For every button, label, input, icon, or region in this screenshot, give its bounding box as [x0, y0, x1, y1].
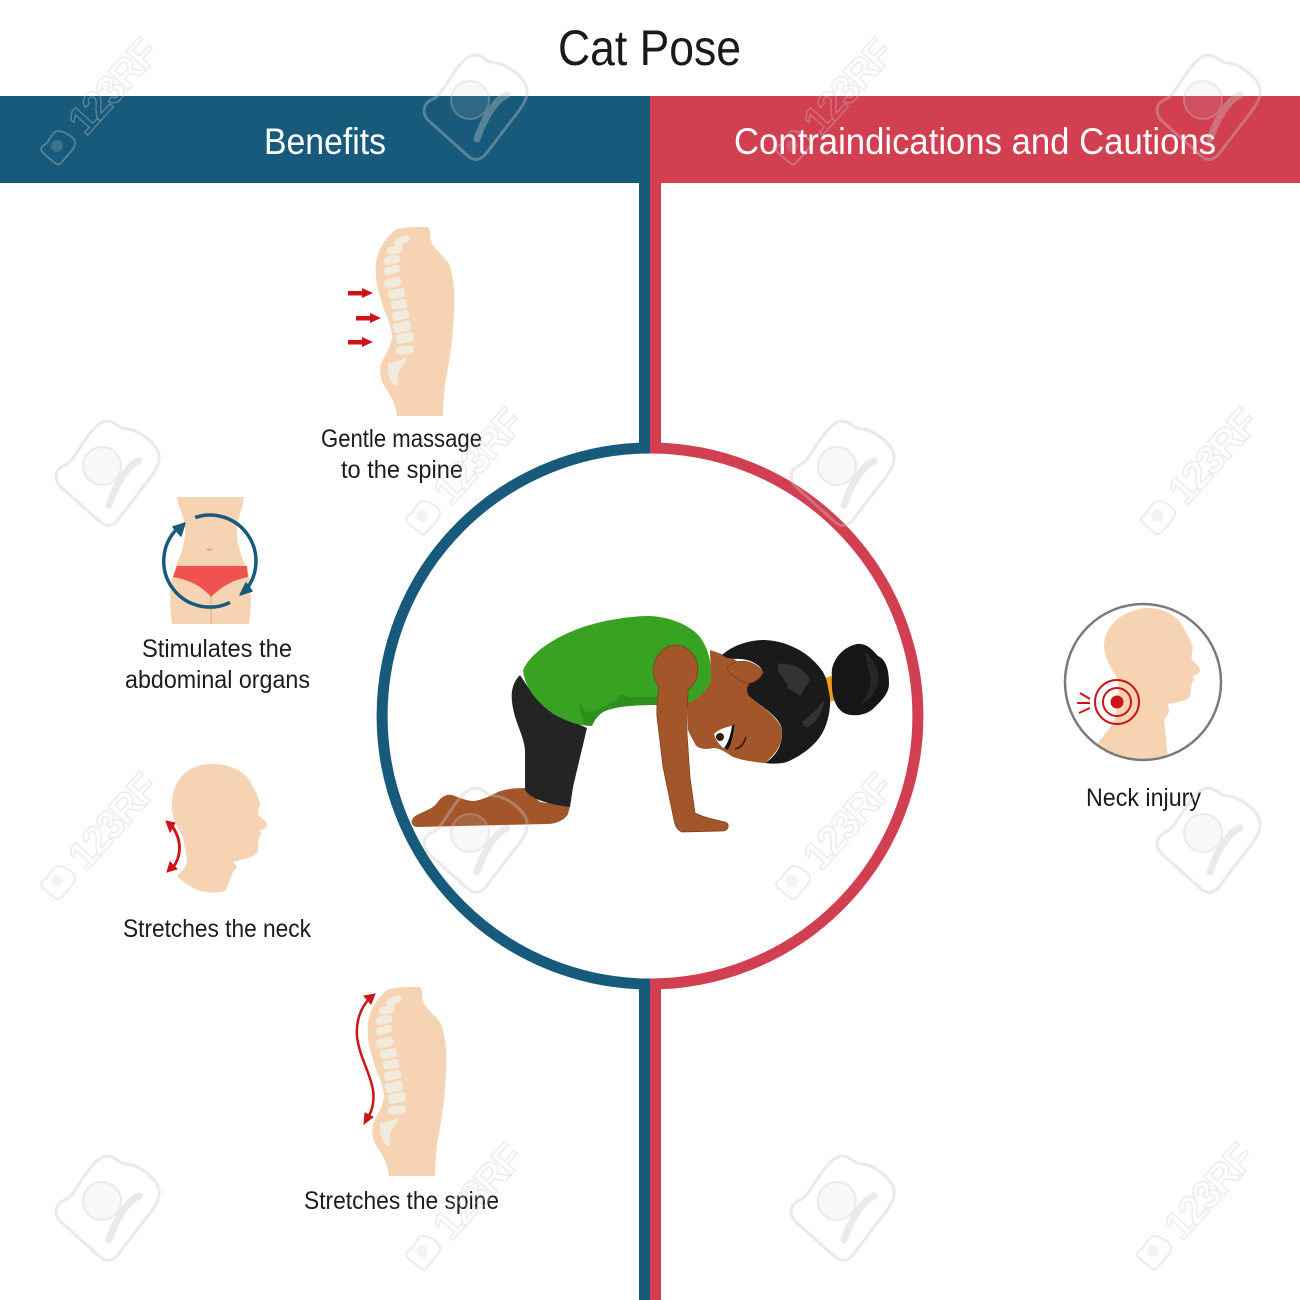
watermark: 123RF: [1160, 400, 1268, 513]
watermark: 123RF: [60, 30, 168, 143]
watermark: 123RF: [425, 1135, 533, 1248]
benefit: stimulates the abdominal organs: [125, 497, 310, 694]
icon: abdomen with circular arrows: [164, 497, 256, 624]
hair tie: [826, 675, 835, 702]
watermark: 123RF: [795, 30, 903, 143]
title: Cat Pose: [558, 20, 741, 76]
central circle frame: [382, 448, 918, 984]
neck and face: [688, 650, 782, 763]
icon: head with neck arrow: [166, 764, 267, 893]
heading: contraindications and cautions: Contraindications and Cautions: [734, 121, 1216, 162]
hair: [722, 640, 830, 764]
label: Neck injury: [1086, 784, 1201, 812]
label: Stretches the neck: [123, 915, 311, 943]
label: Gentle massage: [321, 425, 482, 453]
figure: woman in cat pose: [412, 616, 889, 832]
icon: back with spine and pressure arrows: [348, 227, 454, 416]
benefit: stretches the spine: [304, 987, 499, 1215]
ear: [727, 661, 763, 683]
hair bun: [832, 644, 889, 715]
watermark: 123RF: [1156, 1135, 1264, 1248]
label: Stimulates the: [142, 635, 292, 663]
icon: head in circle with pain target: [1065, 604, 1221, 760]
central divider line: [639, 183, 661, 1300]
panel header: benefits: [0, 96, 650, 183]
shorts: [512, 675, 587, 807]
benefit: gentle massage to the spine: [321, 227, 482, 484]
caution: neck injury: [1065, 604, 1221, 812]
watermark: 123RF: [60, 765, 168, 878]
shirt: [523, 616, 711, 726]
label: Stretches the spine: [304, 1187, 499, 1215]
label: to the spine: [341, 456, 463, 484]
panel header: contraindications: [650, 96, 1300, 183]
icon: back with spine and stretch arrow: [357, 987, 446, 1176]
watermark: 123RF: [795, 765, 903, 878]
watermark: 123RF: [425, 400, 533, 513]
near arm: [653, 645, 728, 832]
benefit: stretches the neck: [123, 764, 311, 943]
far leg and foot: [412, 788, 570, 827]
label: abdominal organs: [125, 666, 310, 694]
eye: [714, 725, 735, 750]
heading: benefits: Benefits: [264, 121, 386, 162]
